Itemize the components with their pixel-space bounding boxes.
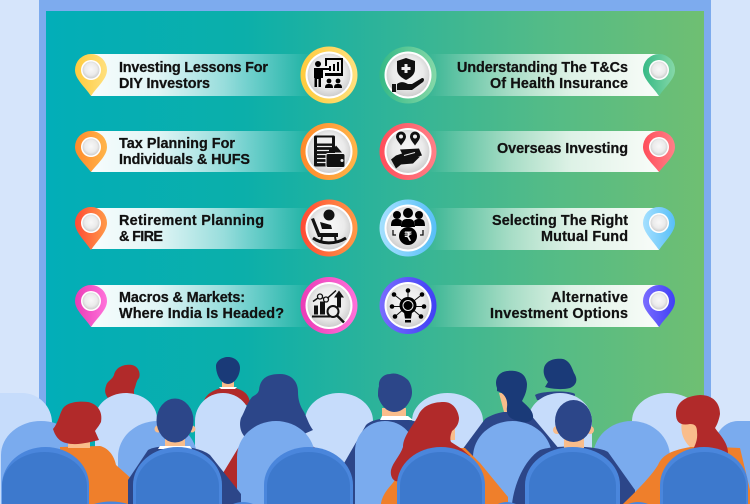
front row person: blue head, navy jacket, right <box>512 400 635 504</box>
topic: Selecting The Right Mutual Fund <box>380 200 675 256</box>
icon: presenter with board <box>314 58 343 88</box>
topic: Overseas Investing: Overseas Investing <box>497 141 628 157</box>
topic: Selecting The Right Mutual Fund: Selecting The Right <box>492 213 628 229</box>
topic: Retirement Planning & FIRE <box>75 200 358 256</box>
middle row person: ponytail, navy jacket <box>462 371 560 504</box>
middle row person: long navy hair, red top <box>220 374 330 504</box>
middle row of seats <box>1 421 750 504</box>
icon: rocking chair with rupee coin <box>311 210 346 243</box>
topic: Selecting The Right Mutual Fund: Mutual Fund <box>541 229 628 245</box>
back row person: red hair <box>100 365 158 420</box>
front row person: blue head, navy jacket, left <box>128 398 241 504</box>
topic: Tax Planning For Individuals & HUFS: Tax Planning For <box>119 136 235 152</box>
audience <box>0 357 750 504</box>
topic: Understanding The T&Cs Of Health Insurance <box>380 46 675 104</box>
front row of seats <box>2 447 748 504</box>
front row person: long red hair, orange top, centre <box>381 402 508 504</box>
topic: Retirement Planning & FIRE: & FIRE <box>119 229 163 245</box>
topic: Macros & Markets: Where India Is Headed? <box>75 277 358 334</box>
icon: tax sheet and wallet <box>314 136 345 168</box>
icon: group of people with rupee coin <box>391 208 425 245</box>
topic: Alternative Investment Options <box>380 277 675 334</box>
topic: Investing Lessons For DIY Investors: DIY Investors <box>119 76 210 92</box>
topic: Macros & Markets: Where India Is Headed?: Macros & Markets: <box>119 290 245 306</box>
topic: Understanding The T&Cs Of Health Insurance: Understanding The T&Cs <box>457 60 628 76</box>
topic: Tax Planning For Individuals & HUFS <box>75 123 358 180</box>
topic: Investing Lessons For DIY Investors: Investing Lessons For <box>119 60 268 76</box>
front row person: red hair, orange top, right <box>623 395 750 504</box>
topic: Retirement Planning & FIRE: Retirement Planning <box>119 213 264 229</box>
back row person: dark curly hair <box>203 357 250 405</box>
topic: Overseas Investing <box>380 123 675 180</box>
topic: Alternative Investment Options: Investment Options <box>490 306 628 322</box>
back row person: dark bob hair <box>535 359 576 400</box>
topic: Understanding The T&Cs Of Health Insurance: Of Health Insurance <box>490 76 628 92</box>
icon: growth chart with magnifier <box>312 290 344 322</box>
topic: Tax Planning For Individuals & HUFS: Individuals & HUFS <box>119 152 250 168</box>
middle row person: curly head, navy jacket <box>343 373 418 504</box>
topic: Investing Lessons For DIY Investors <box>75 46 358 104</box>
icon: location pins over hand with cash <box>391 132 422 168</box>
topic: Alternative Investment Options: Alternative <box>551 290 628 306</box>
topic: Macros & Markets: Where India Is Headed?: Where India Is Headed? <box>119 306 284 322</box>
front row person: red hair, orange top, left <box>53 402 134 504</box>
icon: group of people with rupee coin: ₹ <box>404 230 412 244</box>
icon: shield on open hand <box>392 58 424 92</box>
icon: light bulb with network nodes <box>390 288 426 322</box>
back row of seats <box>0 393 703 504</box>
